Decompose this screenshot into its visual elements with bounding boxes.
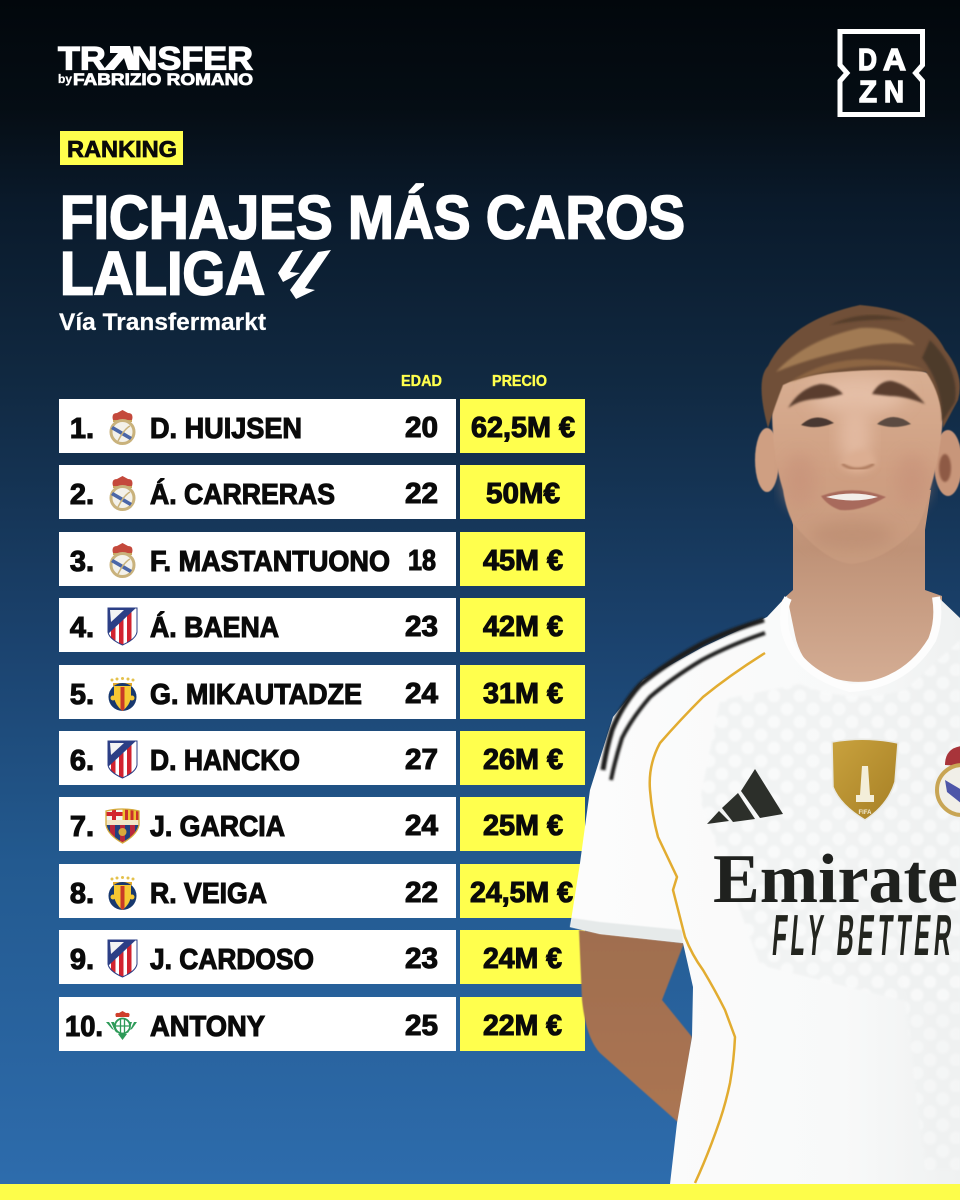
chest pattern (700, 640, 960, 1000)
row 3: F. MASTANTUONO (150, 546, 390, 578)
row 8: 22 (405, 877, 438, 909)
row 1 (59, 399, 585, 453)
row 6: D. HANCKO (150, 745, 300, 777)
shirt (570, 596, 960, 1184)
row 3 (59, 532, 585, 586)
tag: ranking: RANKING (67, 136, 177, 162)
row 6: 26M € (483, 744, 563, 776)
logo: DAZN: D (858, 42, 877, 77)
row 7 (59, 797, 585, 851)
logo: DAZN: A (883, 42, 906, 77)
row 5: G. MIKAUTADZE (150, 679, 362, 711)
arm (579, 930, 692, 1124)
column headers: EDAD (401, 373, 442, 390)
eyebrows (788, 384, 843, 408)
icon: LaLiga logo (278, 250, 331, 299)
row 7: J. GARCIA (150, 811, 285, 843)
player illustration (570, 305, 960, 1184)
title (60, 184, 685, 308)
column headers: PRECIO (492, 373, 547, 390)
ranking table (59, 399, 585, 1051)
row 9 (59, 930, 585, 984)
row 3: 3. (70, 546, 94, 578)
eyes (801, 417, 834, 427)
row 2: 22 (405, 478, 438, 510)
logo: Transfer by Fabrizio Romano: by (58, 72, 72, 86)
mouth (821, 490, 886, 510)
logo: Transfer by Fabrizio Romano: FABRIZIO ROMANO (73, 71, 253, 89)
tag: ranking (60, 131, 183, 165)
column headers (401, 373, 547, 390)
row 6: 27 (405, 744, 438, 776)
logo: Transfer by Fabrizio Romano: TRANSFER (58, 40, 253, 76)
nose (840, 450, 876, 472)
row 10: 25 (405, 1010, 438, 1042)
row 8: 8. (70, 878, 94, 910)
row 7: 7. (70, 811, 94, 843)
row 1: 1. (70, 413, 94, 445)
row 3: 45M € (483, 545, 563, 577)
row 4: 42M € (483, 611, 563, 643)
row 4: 23 (405, 611, 438, 643)
collar (784, 597, 937, 688)
ears (755, 428, 960, 496)
adidas logo (707, 769, 783, 824)
row 10 (59, 997, 585, 1051)
row 1: 20 (405, 412, 438, 444)
row 10: ANTONY (150, 1011, 265, 1043)
row 1: 62,5M € (471, 412, 575, 444)
title: LALIGA (60, 240, 265, 308)
Real Madrid crest on shirt (937, 746, 960, 815)
row 10: 22M € (483, 1010, 562, 1042)
row 9: 9. (70, 944, 94, 976)
sleeve hem (570, 918, 683, 943)
title: FICHAJES MÁS CAROS (60, 184, 685, 252)
row 4: Á. BAENA (150, 610, 279, 644)
sponsor slogan: FLY BETTER (770, 904, 958, 968)
shoulder stripes (603, 620, 765, 780)
FIFA badge: FIFA (858, 810, 872, 816)
logo: Transfer by Fabrizio Romano (58, 40, 253, 89)
row 6 (59, 731, 585, 785)
neck (782, 490, 942, 690)
row 6: 6. (70, 745, 94, 777)
row 4: 4. (70, 612, 94, 644)
row 1: D. HUIJSEN (150, 413, 302, 445)
row 9: J. CARDOSO (150, 944, 314, 976)
row 5: 31M € (483, 678, 563, 710)
row 2: Á. CARRERAS (150, 477, 335, 511)
row 4 (59, 598, 585, 652)
face (772, 360, 944, 564)
row 3: 18 (408, 545, 436, 577)
FIFA badge (832, 739, 898, 820)
logo: DAZN: N (884, 74, 904, 109)
logo: DAZN (840, 32, 922, 114)
row 9: 24M € (483, 943, 562, 975)
row 2: 2. (70, 479, 94, 511)
bottom yellow band (0, 1184, 960, 1200)
row 8: R. VEIGA (150, 878, 267, 910)
row 5: 5. (70, 679, 94, 711)
row 7: 24 (405, 810, 438, 842)
hair (762, 305, 960, 428)
row 5 (59, 665, 585, 719)
row 7: 25M € (483, 810, 563, 842)
gold piping (650, 653, 765, 1183)
row 5: 24 (405, 678, 438, 710)
row 8: 24,5M € (470, 877, 573, 909)
row 2 (59, 465, 585, 519)
row 8 (59, 864, 585, 918)
source note: Vía Transfermarkt (59, 309, 266, 336)
logo: DAZN: Z (859, 74, 877, 109)
row 10: 10. (65, 1011, 103, 1043)
row 9: 23 (405, 943, 438, 975)
row 2: 50M€ (486, 478, 560, 510)
